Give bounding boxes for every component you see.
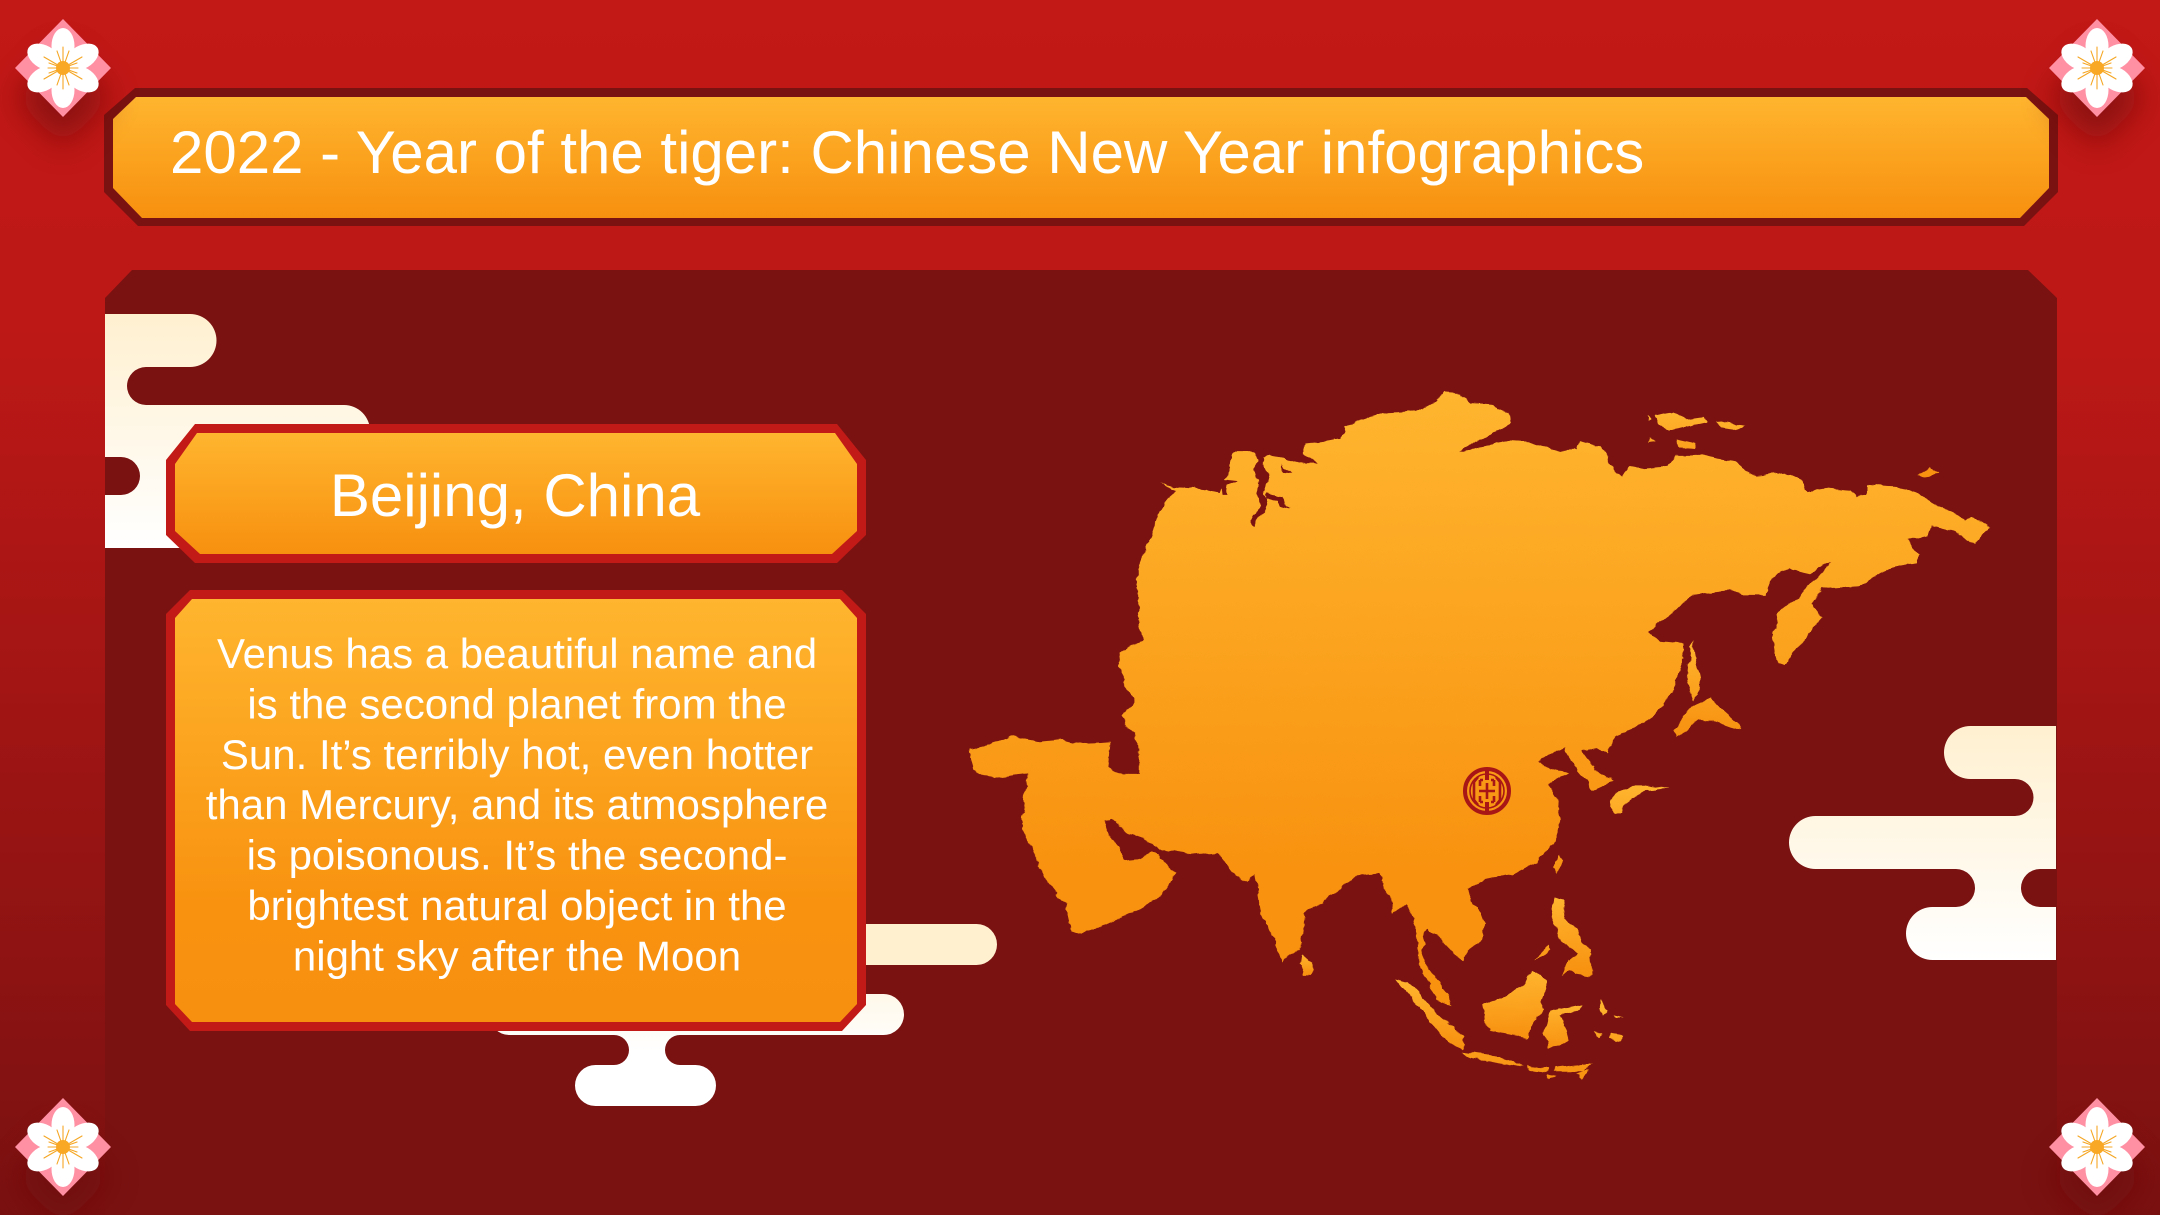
- Sri Lanka: [1300, 953, 1312, 976]
- description box: [166, 590, 866, 1031]
- islands: [1300, 412, 1940, 1079]
- title: 2022 - Year of the tiger: Chinese New Year infographics: [170, 119, 1644, 186]
- cloud: top left: [105, 314, 370, 548]
- description text: Venus has a beautiful name and: [217, 630, 817, 677]
- cloud: right: [1789, 726, 2056, 960]
- cloud: bottom lower shape: [489, 994, 904, 1106]
- location name: Beijing, China: [330, 462, 701, 529]
- description text: night sky after the Moon: [293, 932, 741, 979]
- description text: brightest natural object in the: [247, 882, 787, 929]
- Arctic islands: [1648, 412, 1940, 476]
- description text: Sun. It’s terribly hot, even hotter: [221, 731, 813, 778]
- Japan and Taiwan: [1553, 785, 1670, 875]
- icon: flower bottom right: [2049, 1098, 2145, 1215]
- map of Asia: [969, 392, 1990, 1079]
- cloud: bottom upper bar: [700, 924, 997, 965]
- icon: flower top left: [15, 19, 111, 147]
- icon: flower bottom left: [15, 1098, 111, 1215]
- icon: flower top right: [2049, 19, 2145, 147]
- Sulawesi: [1545, 1003, 1582, 1049]
- Sakhalin and Hokkaido: [1675, 639, 1740, 737]
- Sumatra: [1396, 980, 1464, 1049]
- map shapes: [969, 392, 1990, 1079]
- Java and small islands: [1462, 1001, 1625, 1079]
- Philippines: [1535, 898, 1591, 976]
- mainland: [969, 392, 1990, 1006]
- Borneo: [1483, 970, 1548, 1039]
- panel: main dark panel: [105, 270, 2057, 1215]
- title banner: [104, 88, 2058, 226]
- description text: is the second planet from the: [247, 680, 787, 727]
- icon: Chinese emblem on Beijing: [1465, 768, 1509, 814]
- northern gulfs: [1220, 456, 1291, 526]
- description text: than Mercury, and its atmosphere: [206, 781, 828, 828]
- description text: is poisonous. It’s the second-: [247, 832, 787, 879]
- location banner: [166, 424, 866, 563]
